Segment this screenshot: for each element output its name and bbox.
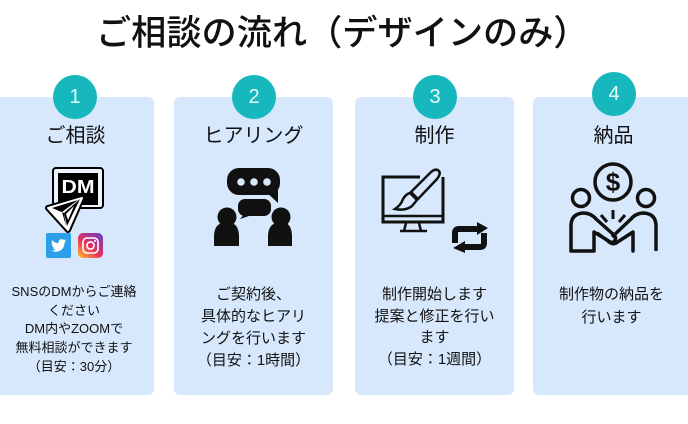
text: step 1 description: DM内やZOOMで	[25, 321, 123, 336]
text: step 3 description: 提案と修正を行い	[374, 308, 494, 325]
text: step 1 description: ください	[48, 303, 100, 318]
panel: step 1 card	[0, 97, 154, 395]
icon: DM paper plane: DM	[62, 177, 94, 197]
panel: step 2 card	[174, 97, 333, 395]
text: step 3 description: ます	[419, 329, 450, 346]
icon: repeat arrows	[453, 222, 488, 253]
text: step 1 description: 無料相談ができます	[15, 340, 132, 355]
icon: handshake and coin: $	[606, 167, 621, 197]
text: step 4 description	[559, 286, 664, 326]
text: step 2 description: ングを行います	[201, 330, 306, 347]
text: step 2 description: ご契約後、	[216, 286, 291, 303]
step number 1: 1	[69, 86, 81, 108]
text: step 3 description: （目安：1週間）	[378, 351, 491, 368]
text: step 2 description: （目安：1時間）	[197, 352, 310, 369]
text: step 3 description: 制作開始します	[382, 286, 487, 303]
heading: step 4: 納品	[594, 125, 634, 147]
step number 4: 4	[608, 83, 620, 105]
step number 2: 2	[248, 86, 260, 108]
step number 4	[592, 72, 636, 116]
step number 3	[413, 75, 457, 119]
icon: handshake and coin	[569, 162, 658, 253]
heading: step 1: ご相談	[46, 125, 106, 147]
panel: step 4 card	[533, 97, 688, 395]
heading: step 3: 制作	[414, 125, 454, 147]
icon: Instagram	[78, 233, 103, 258]
panel: step 3 card	[355, 97, 514, 395]
text: step 4 description: 制作物の納品を	[559, 286, 664, 303]
text: step 1 description: （目安：30分）	[28, 359, 120, 374]
text: step 3 description	[374, 286, 494, 368]
title: ご相談の流れ（デザインのみ）	[96, 14, 589, 53]
step number 1	[53, 75, 97, 119]
icon: conversation	[214, 168, 292, 246]
icon: Twitter	[46, 233, 71, 258]
step number 2	[232, 75, 276, 119]
heading: step 2: ヒアリング	[204, 125, 304, 147]
text: step 2 description: 具体的なヒアリ	[201, 308, 306, 325]
text: step 4 description: 行います	[581, 309, 642, 326]
icon: monitor with paintbrush and repeat	[382, 168, 488, 253]
icon: DM paper plane	[45, 167, 104, 233]
text: step 1 description	[12, 284, 136, 374]
text: step 2 description	[197, 286, 310, 369]
text: step 1 description: SNSのDMからご連絡	[12, 284, 136, 299]
step number 3: 3	[429, 86, 441, 108]
